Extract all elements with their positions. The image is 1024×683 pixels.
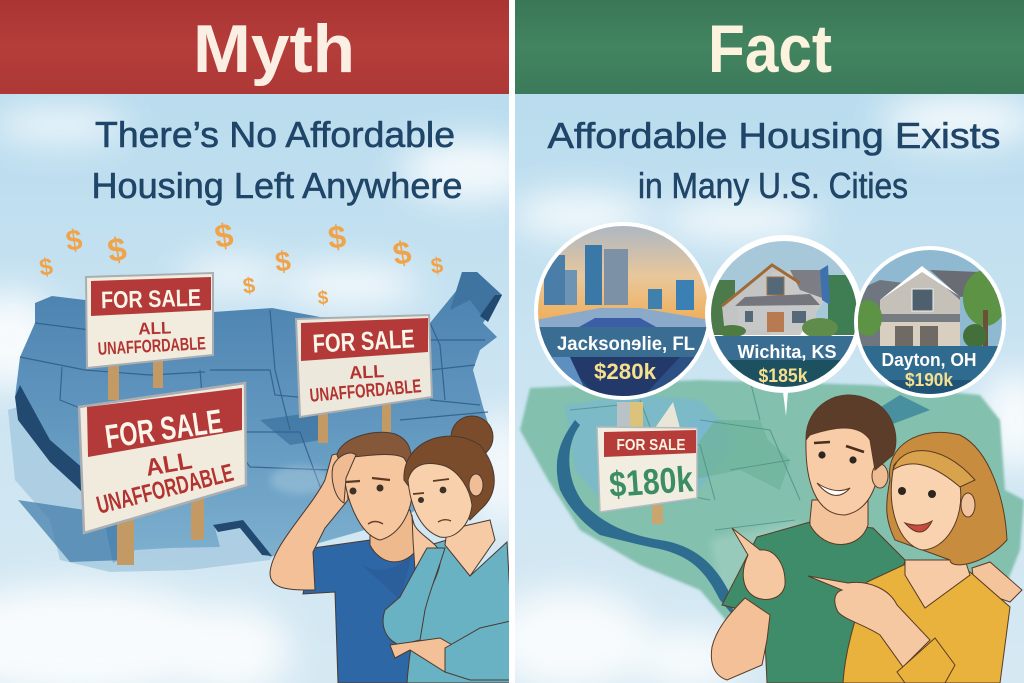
city circle: Jacksonville	[530, 222, 716, 407]
heading: Fact: Fact	[708, 11, 832, 87]
city label: Jacksonville: Jacksonɘlie, FL	[557, 334, 695, 355]
price: $190k: $190k	[905, 370, 954, 390]
floating dollar signs: $	[64, 224, 84, 258]
floating dollar signs: $	[38, 253, 55, 282]
for sale sign: top left: ALL	[138, 318, 172, 339]
panel: fact	[490, 0, 1024, 683]
sky background	[0, 94, 540, 683]
panel: myth	[0, 0, 540, 683]
for sale sign: $180k	[597, 402, 697, 524]
floating dollar signs: $	[105, 230, 129, 269]
city circle: Dayton	[854, 246, 1007, 406]
for sale sign: top left: FOR SALE	[101, 285, 201, 314]
for sale sign: front: ALL	[144, 447, 194, 482]
worried woman	[383, 416, 515, 683]
worried man	[270, 432, 415, 683]
floating dollar signs: $	[274, 245, 293, 278]
floating dollar signs: $	[430, 252, 444, 279]
price: $185k: $185k	[758, 366, 808, 387]
for sale sign: right: ALL	[349, 361, 385, 383]
US map: fact	[520, 380, 1024, 640]
for sale sign: right	[296, 315, 432, 443]
pin tail	[783, 392, 788, 416]
heading: Myth: Myth	[193, 11, 355, 87]
happy man	[711, 395, 1022, 683]
happy woman	[808, 432, 1010, 683]
for sale sign: front: FOR SALE	[103, 402, 225, 455]
heading: fact statement: Affordable Housing Exists	[548, 115, 1000, 156]
floating dollar signs	[38, 216, 444, 309]
floating dollar signs: $	[390, 234, 414, 272]
city label: Wichita: Wichita, KS	[738, 342, 836, 362]
for sale sign: front: UNAFFORDABLE	[94, 459, 236, 520]
floating dollar signs: $	[317, 288, 329, 309]
heading: myth statement: There’s No Affordable	[95, 114, 455, 155]
price: $280k: $280k	[594, 359, 657, 384]
for sale sign: right: FOR SALE	[312, 323, 415, 359]
for sale sign: $180k: FOR SALE	[616, 437, 686, 454]
floating dollar signs: $	[242, 272, 256, 299]
floating dollar signs: $	[326, 218, 348, 256]
for sale sign: front	[79, 383, 246, 565]
heading: fact statement: in Many U.S. Cities	[638, 165, 908, 206]
heading: myth statement: Housing Left Anywhere	[92, 165, 462, 206]
US map: myth	[8, 272, 502, 572]
city circle: Wichita	[705, 235, 863, 400]
floating dollar signs: $	[212, 216, 236, 255]
header band: fact	[515, 0, 1024, 94]
for sale sign: right: UNAFFORDABLE	[309, 376, 422, 407]
for sale sign: top left	[86, 273, 213, 400]
sky background	[490, 94, 1024, 683]
heading: fact statement	[548, 115, 1000, 206]
for sale sign: $180k: $180k	[608, 458, 695, 505]
header band: myth	[0, 0, 509, 94]
city label: Dayton: Dayton, OH	[882, 350, 976, 370]
happy couple	[711, 395, 1022, 683]
heading: myth statement	[92, 114, 462, 206]
worried couple	[270, 416, 515, 683]
for sale sign: top left: UNAFFORDABLE	[97, 333, 206, 359]
